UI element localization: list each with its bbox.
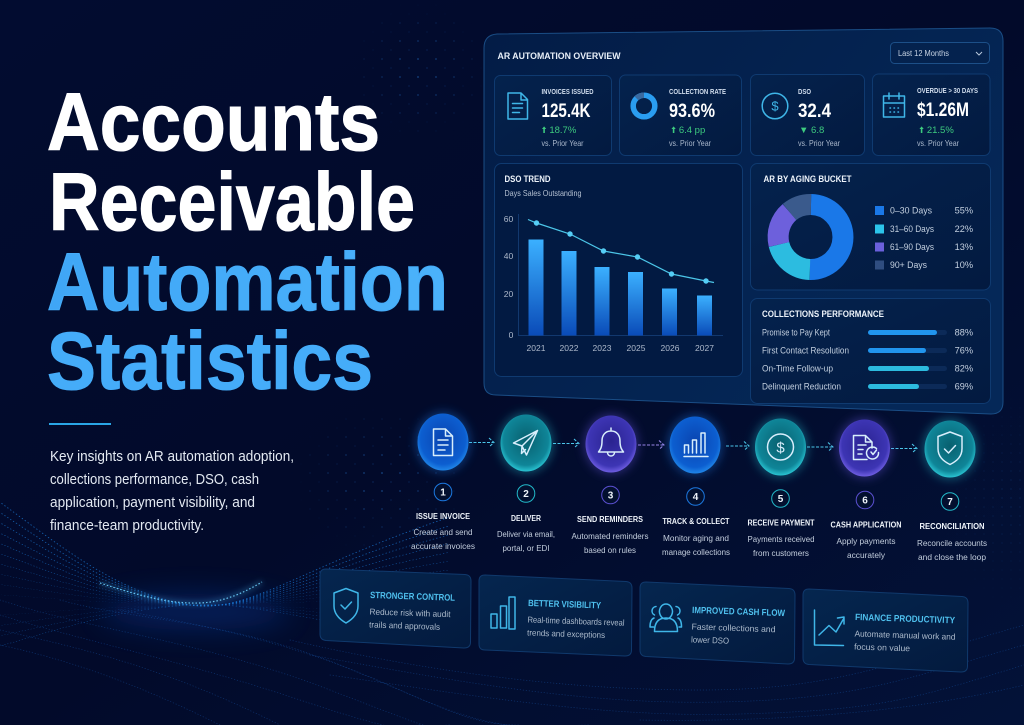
KPI: overdue: vs. Prior Year bbox=[917, 138, 959, 148]
step 1: issue invoice: 1 bbox=[440, 488, 446, 498]
icon: document check bbox=[854, 436, 879, 460]
title: Automation bbox=[47, 237, 448, 328]
title: Accounts bbox=[47, 77, 380, 168]
step 4: track and collect: Monitor aging and bbox=[663, 533, 729, 543]
step 2: deliver: 2 bbox=[523, 489, 529, 500]
axis labels: 2025 bbox=[627, 343, 646, 353]
KPI: DSO: 32.4 bbox=[798, 101, 831, 122]
rows: First Contact Resolution bbox=[762, 346, 849, 356]
step 7: reconciliation: and close the loop bbox=[918, 552, 986, 562]
step 6: cash application: Apply payments bbox=[836, 536, 896, 546]
legend: 90+ Days bbox=[890, 260, 927, 270]
axis labels bbox=[504, 214, 714, 353]
step 7: reconciliation: 7 bbox=[947, 497, 953, 508]
axis labels: 2026 bbox=[661, 343, 680, 353]
step 4: track and collect bbox=[662, 415, 730, 557]
icon: bell bbox=[598, 428, 624, 456]
dashboard panel bbox=[484, 28, 1003, 414]
axis labels: 40 bbox=[504, 251, 513, 261]
bars bbox=[528, 240, 712, 336]
legend bbox=[875, 206, 973, 270]
rows: On-Time Follow-up bbox=[762, 364, 833, 374]
rows: 88% bbox=[955, 328, 973, 338]
step 3: send reminders: 3 bbox=[608, 490, 614, 502]
benefit card: better visibility bbox=[479, 575, 632, 656]
icon: dollar bbox=[768, 434, 794, 460]
step 5: receive payment bbox=[748, 417, 815, 558]
step 1: issue invoice: accurate invoices bbox=[411, 541, 475, 551]
title bbox=[47, 77, 448, 407]
step 6: cash application: accurately bbox=[847, 550, 886, 560]
DSO trend chart: Days Sales Outstanding bbox=[504, 188, 582, 198]
KPI: overdue bbox=[872, 74, 990, 156]
KPI: collection rate: COLLECTION RATE bbox=[669, 89, 726, 96]
step 2: deliver: Deliver via email, bbox=[497, 529, 555, 539]
AR by aging bucket: AR BY AGING BUCKET bbox=[764, 173, 852, 184]
rows: 76% bbox=[955, 346, 973, 356]
rows: Promise to Pay Kept bbox=[762, 328, 830, 338]
benefit card: improved cash flow bbox=[640, 582, 795, 664]
step 2: deliver: DELIVER bbox=[511, 513, 542, 523]
benefit card: improved cash flow: Faster collections and bbox=[691, 621, 776, 634]
step 7: reconciliation bbox=[917, 419, 987, 562]
axis labels: 2021 bbox=[527, 343, 546, 353]
step 1: issue invoice bbox=[411, 412, 475, 551]
AR by aging bucket bbox=[750, 164, 990, 290]
collections performance: COLLECTIONS PERFORMANCE bbox=[762, 308, 884, 319]
icon: bar chart bbox=[684, 433, 708, 456]
step 2: deliver bbox=[497, 413, 555, 553]
legend: 31–60 Days bbox=[890, 224, 934, 234]
date range dropdown bbox=[890, 42, 990, 64]
step 7: reconciliation: RECONCILIATION bbox=[920, 521, 984, 531]
legend: 22% bbox=[955, 224, 973, 234]
axis labels: 20 bbox=[504, 289, 513, 299]
KPI: overdue: $1.26M bbox=[917, 100, 969, 121]
benefit card: improved cash flow: lower DSO bbox=[691, 634, 730, 646]
icon: document bbox=[434, 429, 452, 456]
donut chart bbox=[778, 204, 843, 270]
rows bbox=[762, 328, 973, 392]
benefit card: stronger control bbox=[320, 569, 471, 648]
icon: paper plane bbox=[514, 430, 538, 455]
title rule bbox=[49, 423, 111, 425]
description: Key insights on AR automation adoption, bbox=[50, 449, 294, 465]
KPI: overdue: 🠩 21.5% bbox=[919, 125, 954, 136]
step 5: receive payment: Payments received bbox=[748, 534, 815, 544]
legend: 55% bbox=[955, 206, 973, 216]
benefit card: finance productivity: Automate manual work and bbox=[854, 628, 956, 642]
KPI: collection rate bbox=[620, 75, 742, 156]
title: Statistics bbox=[47, 316, 373, 407]
KPI: DSO bbox=[750, 74, 864, 156]
icon: bars bbox=[491, 597, 515, 629]
step 3: send reminders bbox=[572, 414, 648, 555]
icon: shield check bbox=[938, 432, 962, 464]
step 1: issue invoice: ISSUE INVOICE bbox=[416, 511, 470, 521]
step 5: receive payment: RECEIVE PAYMENT bbox=[748, 518, 815, 528]
step 5: receive payment: 5 bbox=[778, 494, 784, 505]
benefit card: better visibility: BETTER VISIBILITY bbox=[528, 598, 601, 610]
step 4: track and collect: 4 bbox=[693, 492, 699, 503]
step 6: cash application: 6 bbox=[862, 496, 868, 506]
legend: 10% bbox=[955, 260, 973, 270]
icon: growth chart bbox=[814, 610, 844, 646]
step 1: issue invoice: Create and send bbox=[414, 527, 473, 537]
axis labels: 2023 bbox=[593, 343, 612, 353]
KPI: invoices issued: 🠩 18.7% bbox=[542, 125, 577, 136]
benefit card: stronger control: trails and approvals bbox=[369, 619, 440, 632]
benefit card: finance productivity: focus on value bbox=[854, 641, 910, 653]
KPI: invoices issued: 125.4K bbox=[542, 101, 591, 122]
step 6: cash application bbox=[830, 418, 902, 560]
icon: dollar coin: $ bbox=[771, 98, 779, 114]
step 4: track and collect: TRACK & COLLECT bbox=[662, 516, 730, 526]
benefit card: finance productivity: FINANCE PRODUCTIVITY bbox=[855, 612, 955, 625]
step 2: deliver: portal, or EDI bbox=[502, 543, 550, 553]
benefit card: better visibility: Real-time dashboards reveal bbox=[527, 614, 625, 628]
benefit card: finance productivity bbox=[803, 589, 968, 672]
legend: 0–30 Days bbox=[890, 206, 932, 216]
description bbox=[50, 449, 294, 534]
KPI: invoices issued: vs. Prior Year bbox=[542, 138, 584, 148]
legend: 13% bbox=[955, 242, 973, 252]
date range dropdown: Last 12 Months bbox=[898, 49, 949, 58]
KPI: collection rate: 🠩 6.4 pp bbox=[671, 125, 705, 136]
collections performance bbox=[750, 298, 990, 404]
benefit card: improved cash flow: IMPROVED CASH FLOW bbox=[692, 605, 785, 618]
workflow arrows bbox=[469, 438, 917, 453]
step 3: send reminders: SEND REMINDERS bbox=[577, 514, 643, 524]
KPI: DSO: DSO bbox=[798, 89, 811, 96]
step 6: cash application: CASH APPLICATION bbox=[830, 520, 902, 530]
axis labels: 60 bbox=[504, 214, 513, 224]
rows: 82% bbox=[955, 364, 973, 374]
axis labels: 2022 bbox=[560, 343, 579, 353]
KPI: collection rate: vs. Prior Year bbox=[669, 138, 711, 148]
benefit card: stronger control: STRONGER CONTROL bbox=[370, 590, 456, 603]
icon: people bbox=[650, 604, 682, 632]
description: collections performance, DSO, cash bbox=[50, 472, 259, 488]
KPI: collection rate: 93.6% bbox=[669, 101, 715, 122]
step 7: reconciliation: Reconcile accounts bbox=[917, 538, 987, 548]
KPI: overdue: OVERDUE > 30 DAYS bbox=[917, 88, 978, 95]
icon: document bbox=[508, 93, 528, 119]
legend: 61–90 Days bbox=[890, 242, 934, 252]
KPI: invoices issued: INVOICES ISSUED bbox=[542, 89, 594, 96]
KPI: invoices issued bbox=[494, 76, 612, 156]
rows: Delinquent Reduction bbox=[762, 382, 841, 392]
step 3: send reminders: Automated reminders bbox=[572, 531, 648, 541]
description: finance-team productivity. bbox=[50, 518, 204, 534]
icon: ring gauge bbox=[633, 95, 655, 117]
trend line bbox=[528, 220, 714, 284]
icon: calendar bbox=[884, 93, 904, 117]
rows: 69% bbox=[955, 382, 973, 392]
KPI: DSO: ▼ 6.8 bbox=[799, 125, 824, 136]
description: application, payment visibility, and bbox=[50, 495, 255, 511]
KPI: DSO: vs. Prior Year bbox=[798, 138, 840, 148]
step 4: track and collect: manage collections bbox=[662, 547, 730, 557]
benefit card: better visibility: trends and exceptions bbox=[527, 627, 605, 640]
step 3: send reminders: based on rules bbox=[584, 545, 636, 555]
icon: shield bbox=[334, 588, 358, 623]
title: Receivable bbox=[49, 157, 415, 248]
step 5: receive payment: from customers bbox=[753, 548, 809, 558]
DSO trend chart: DSO TREND bbox=[504, 173, 551, 184]
DSO trend chart bbox=[494, 164, 742, 376]
benefit card: stronger control: Reduce risk with audit bbox=[369, 606, 451, 619]
axis labels: 0 bbox=[509, 330, 514, 340]
icon: dollar: $ bbox=[776, 440, 785, 456]
panel heading: AR AUTOMATION OVERVIEW bbox=[498, 51, 621, 61]
axis labels: 2027 bbox=[695, 343, 714, 353]
